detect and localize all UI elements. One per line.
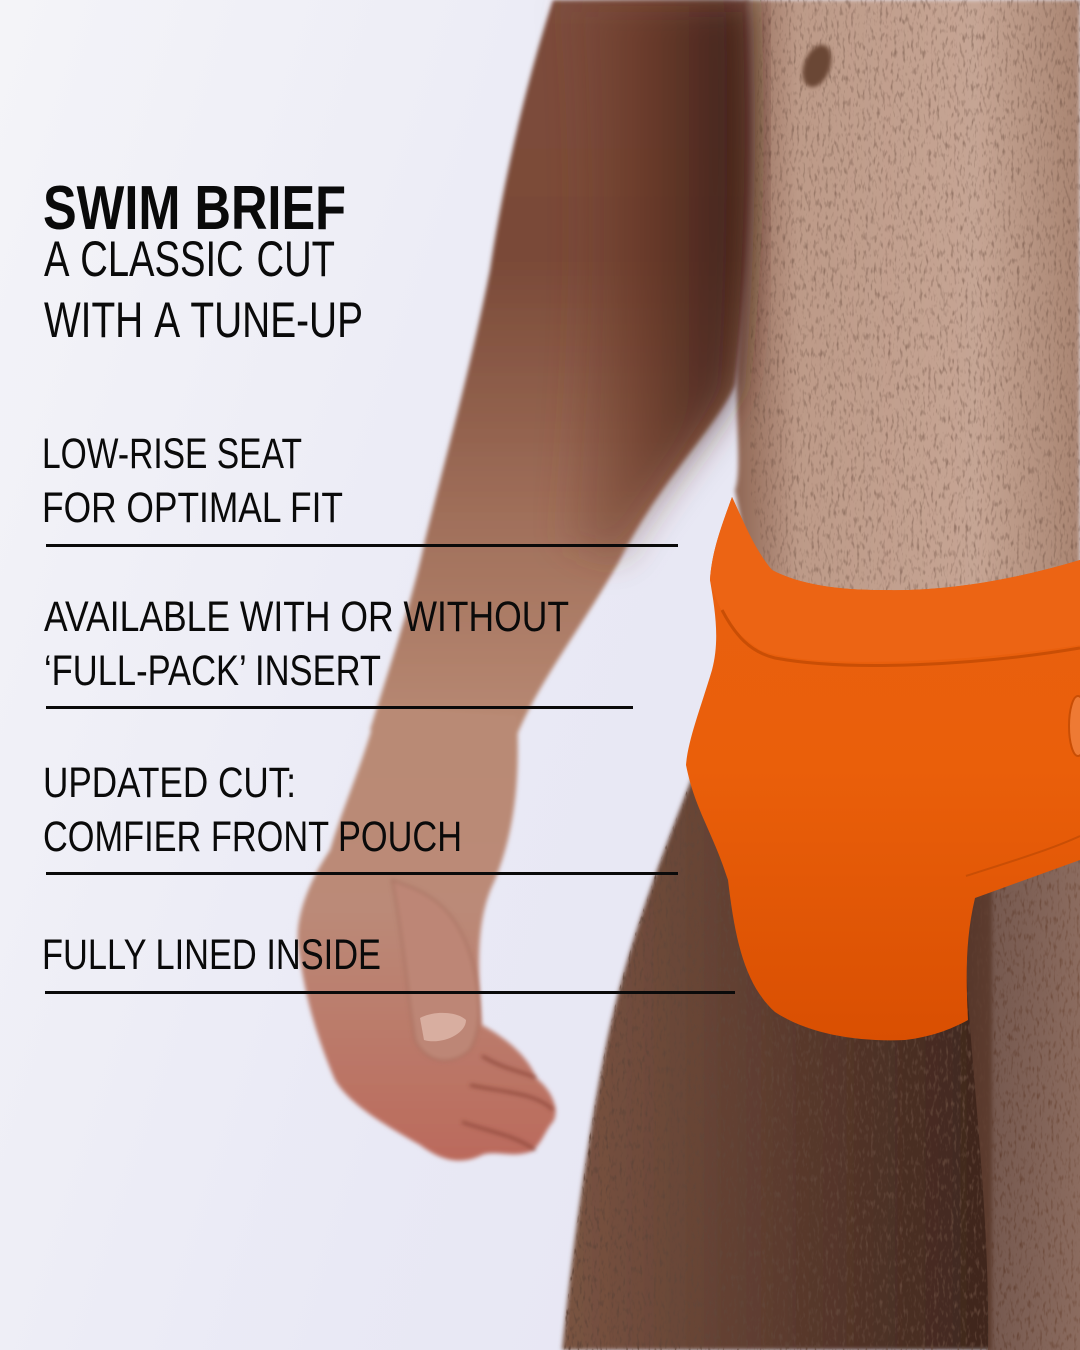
feature: full-pack insert: ‘FULL-PACK’ INSERT [44, 647, 381, 695]
forearm [370, 0, 751, 735]
feature: low-rise seat: FOR OPTIMAL FIT [42, 484, 343, 532]
feature: full-pack insert [44, 593, 633, 709]
torso [735, 0, 1080, 600]
brief body [686, 497, 1080, 1040]
feature: updated cut: COMFIER FRONT POUCH [43, 813, 462, 861]
feature: updated cut: UPDATED CUT: [43, 759, 296, 807]
left leg [562, 770, 992, 1350]
feature list [42, 430, 735, 994]
subtitle: A CLASSIC CUT [44, 231, 335, 287]
side button [1069, 696, 1080, 756]
finger creases [462, 1056, 553, 1150]
arm and hand [298, 0, 751, 1161]
forearm shading [553, 0, 751, 560]
hand [298, 705, 556, 1161]
waistband [710, 497, 1080, 662]
thumbnail [420, 1013, 466, 1041]
figure: product model [298, 0, 1080, 1350]
feature: low-rise seat [42, 430, 678, 547]
subtitle: WITH A TUNE-UP [44, 292, 363, 348]
title: swim brief: SWIM BRIEF [43, 174, 346, 243]
waistband seam [722, 610, 1080, 665]
brief garment [686, 497, 1080, 1040]
title block [43, 174, 363, 348]
feature: fully lined [42, 931, 735, 994]
feature: low-rise seat: LOW-RISE SEAT [42, 430, 302, 478]
leg hair texture [562, 770, 1080, 1350]
right leg [967, 858, 1080, 1350]
thumb [392, 880, 479, 1061]
feature: fully lined: FULLY LINED INSIDE [42, 931, 381, 979]
subtitle [44, 231, 363, 348]
navel [797, 41, 837, 91]
feature: updated cut [43, 759, 678, 875]
leg seam [966, 836, 1080, 876]
feature: full-pack insert: AVAILABLE WITH OR WITHOUT [44, 593, 569, 641]
torso hair texture [750, 0, 1080, 590]
